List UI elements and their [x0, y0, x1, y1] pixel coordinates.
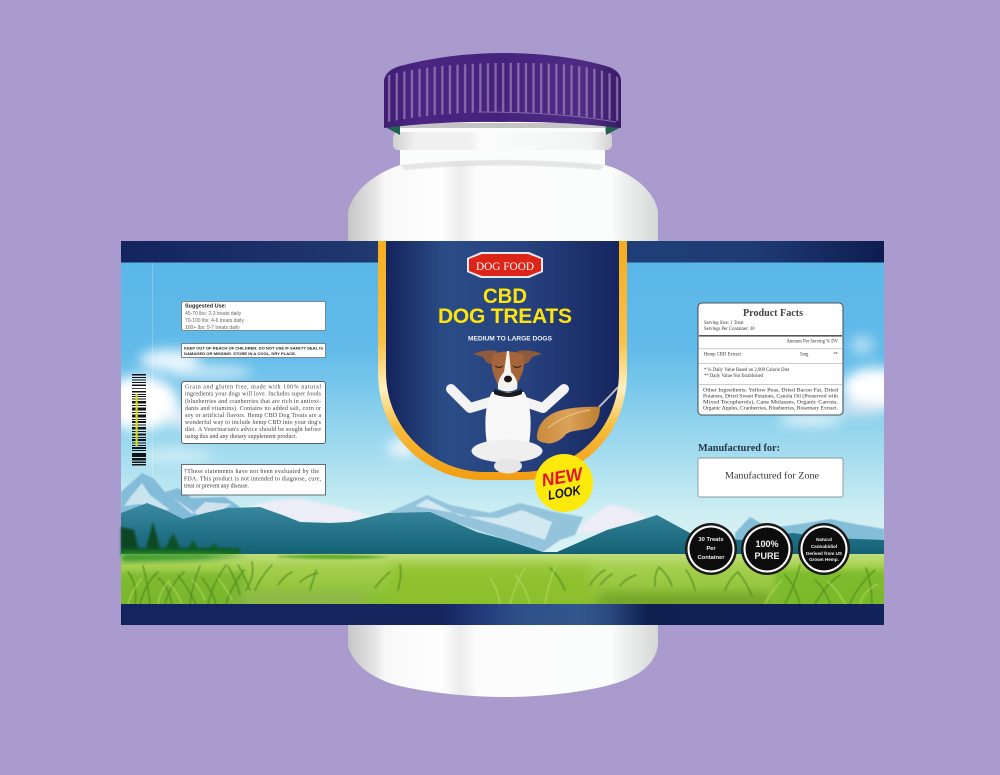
new look badge: LOOK — [547, 482, 583, 503]
centre shield panel — [378, 241, 627, 480]
manufactured for heading: Manufactured for: — [698, 443, 780, 454]
description box: Grain and gluten free, made with 100% natural — [185, 384, 321, 390]
dog illustration — [451, 350, 564, 474]
rear snowy peaks — [121, 473, 884, 552]
badge: natural cannabidiol — [798, 523, 850, 575]
suggested use box — [182, 302, 326, 331]
meadow — [115, 553, 890, 610]
subtitle: MEDIUM TO LARGE DOGS — [468, 336, 552, 342]
grass blades dark — [128, 562, 875, 604]
badge: natural cannabidiol: Grown Hemp. — [809, 557, 839, 562]
clouds — [102, 336, 907, 462]
badge: 100% pure: PURE — [754, 551, 780, 561]
fda disclaimer box: FDA. This product is not intended to diagnose, cure, — [184, 476, 322, 482]
product facts panel: Servings Per Container: 30 — [704, 327, 755, 332]
manufactured for box — [698, 458, 843, 497]
mountains — [121, 473, 884, 557]
manufactured for box: Manufactured for Zone — [725, 470, 819, 482]
dog ears — [473, 350, 497, 364]
barcode — [132, 374, 146, 466]
description box — [182, 382, 326, 444]
sky background — [121, 262, 884, 557]
product facts heading: Product Facts — [743, 308, 803, 319]
badge: natural cannabidiol: Derived from US — [806, 551, 842, 556]
badge: 30 treats: Per — [706, 546, 716, 552]
grass blades light — [128, 565, 878, 604]
product title: DOG TREATS — [438, 305, 572, 328]
product facts panel: ** Daily Value Not Established — [704, 374, 764, 379]
badge: 30 treats — [685, 523, 737, 575]
navy fill — [386, 241, 619, 472]
product facts panel: Organic Apples, Cranberries, Blueberries, Rosemary Extract. — [703, 406, 838, 412]
product facts panel: 5mg — [800, 352, 809, 358]
description box: using this and any dietary supplement product. — [185, 434, 298, 440]
description box: wonderful way to include hemp CBD into your dog's — [185, 419, 322, 426]
dog head — [492, 352, 524, 390]
fda disclaimer box: †These statements have not been evaluated by the — [184, 469, 319, 475]
product facts panel — [698, 303, 843, 415]
fold line — [152, 262, 154, 585]
description box: diet. A Veterinarian's advice should be sought before — [185, 426, 321, 433]
gold border — [378, 241, 627, 480]
bottle shoulder rim — [400, 160, 605, 170]
brand logo: DOG FOOD — [476, 261, 534, 273]
suggested use box: 70-100 lbs: 4-6 treats daily — [185, 318, 244, 324]
new look badge — [535, 454, 593, 512]
product facts panel: Other Ingredients: Yellow Peas, Dried Bacon Fat, Dried — [703, 388, 839, 394]
bottle — [348, 53, 658, 697]
suggested use box: Suggested Use: — [185, 304, 227, 310]
suggested use box: 100+ lbs: 5-7 treats daily — [185, 325, 240, 331]
dog collar — [494, 389, 522, 397]
bottle neck — [393, 120, 612, 168]
top band — [121, 241, 884, 262]
dog legs — [472, 440, 542, 462]
new look badge: NEW — [540, 463, 586, 490]
bottom band — [121, 604, 884, 625]
description box: soy or artificial flavors. Hemp CBD Dog Treats are a — [185, 412, 321, 419]
bottle upper body — [348, 160, 658, 245]
warning box: KEEP OUT OF REACH OF CHILDREN. DO NOT USE IF SAFETY SEAL IS — [184, 346, 323, 350]
badge: 100% pure — [741, 523, 793, 575]
description box: ingredients your dogs will love. Includes super foods — [185, 391, 322, 398]
product facts panel: ** — [833, 352, 839, 358]
fda disclaimer box: treat or prevent any disease. — [184, 484, 249, 490]
product title: CBD — [483, 285, 527, 308]
badge: 100% pure: 100% — [755, 539, 779, 549]
tree line — [121, 522, 240, 556]
dog torso — [485, 392, 531, 450]
product facts panel: Serving Size: 1 Treat — [704, 321, 744, 326]
product facts panel: * % Daily Value Based on 2,000 Calorie Diet — [704, 368, 790, 373]
badge: natural cannabidiol: Natural — [816, 537, 832, 542]
badge: 30 treats: Container — [697, 555, 725, 561]
peanut butter spoon — [537, 387, 618, 443]
dog arms — [451, 389, 490, 408]
suggested use box: 45-70 lbs: 2-3 treats daily — [185, 311, 242, 317]
product title — [438, 285, 572, 328]
warning box: DAMAGED OR MISSING. STORE IN A COOL, DRY PLACE. — [184, 351, 296, 356]
product facts panel: Mixed Tocopherols), Cane Molasses, Organic Carrots, — [703, 400, 838, 406]
bottle lower body — [348, 620, 658, 697]
badge: 30 treats: 30 Treats — [698, 537, 724, 543]
wrap label — [102, 241, 907, 625]
description box: dants and vitamins). Contains no added salt, corn or — [185, 405, 321, 412]
badge: natural cannabidiol: Cannabidiol — [811, 544, 837, 549]
product facts panel: Amount Per Serving % DV — [786, 340, 839, 344]
product facts panel: Hemp CBD Extract — [704, 352, 742, 358]
brand logo — [467, 252, 543, 278]
bottle cap — [384, 53, 621, 135]
product facts panel: Potatoes, Dried Sweet Potatoes, Canola Oil (Preserved with — [703, 394, 839, 400]
teal ridge — [121, 503, 884, 557]
snow haze — [245, 499, 372, 524]
description box: (blueberries and cranberries that are rich in antioxi- — [185, 398, 321, 405]
fda disclaimer box — [182, 464, 326, 495]
warning box — [182, 344, 326, 358]
